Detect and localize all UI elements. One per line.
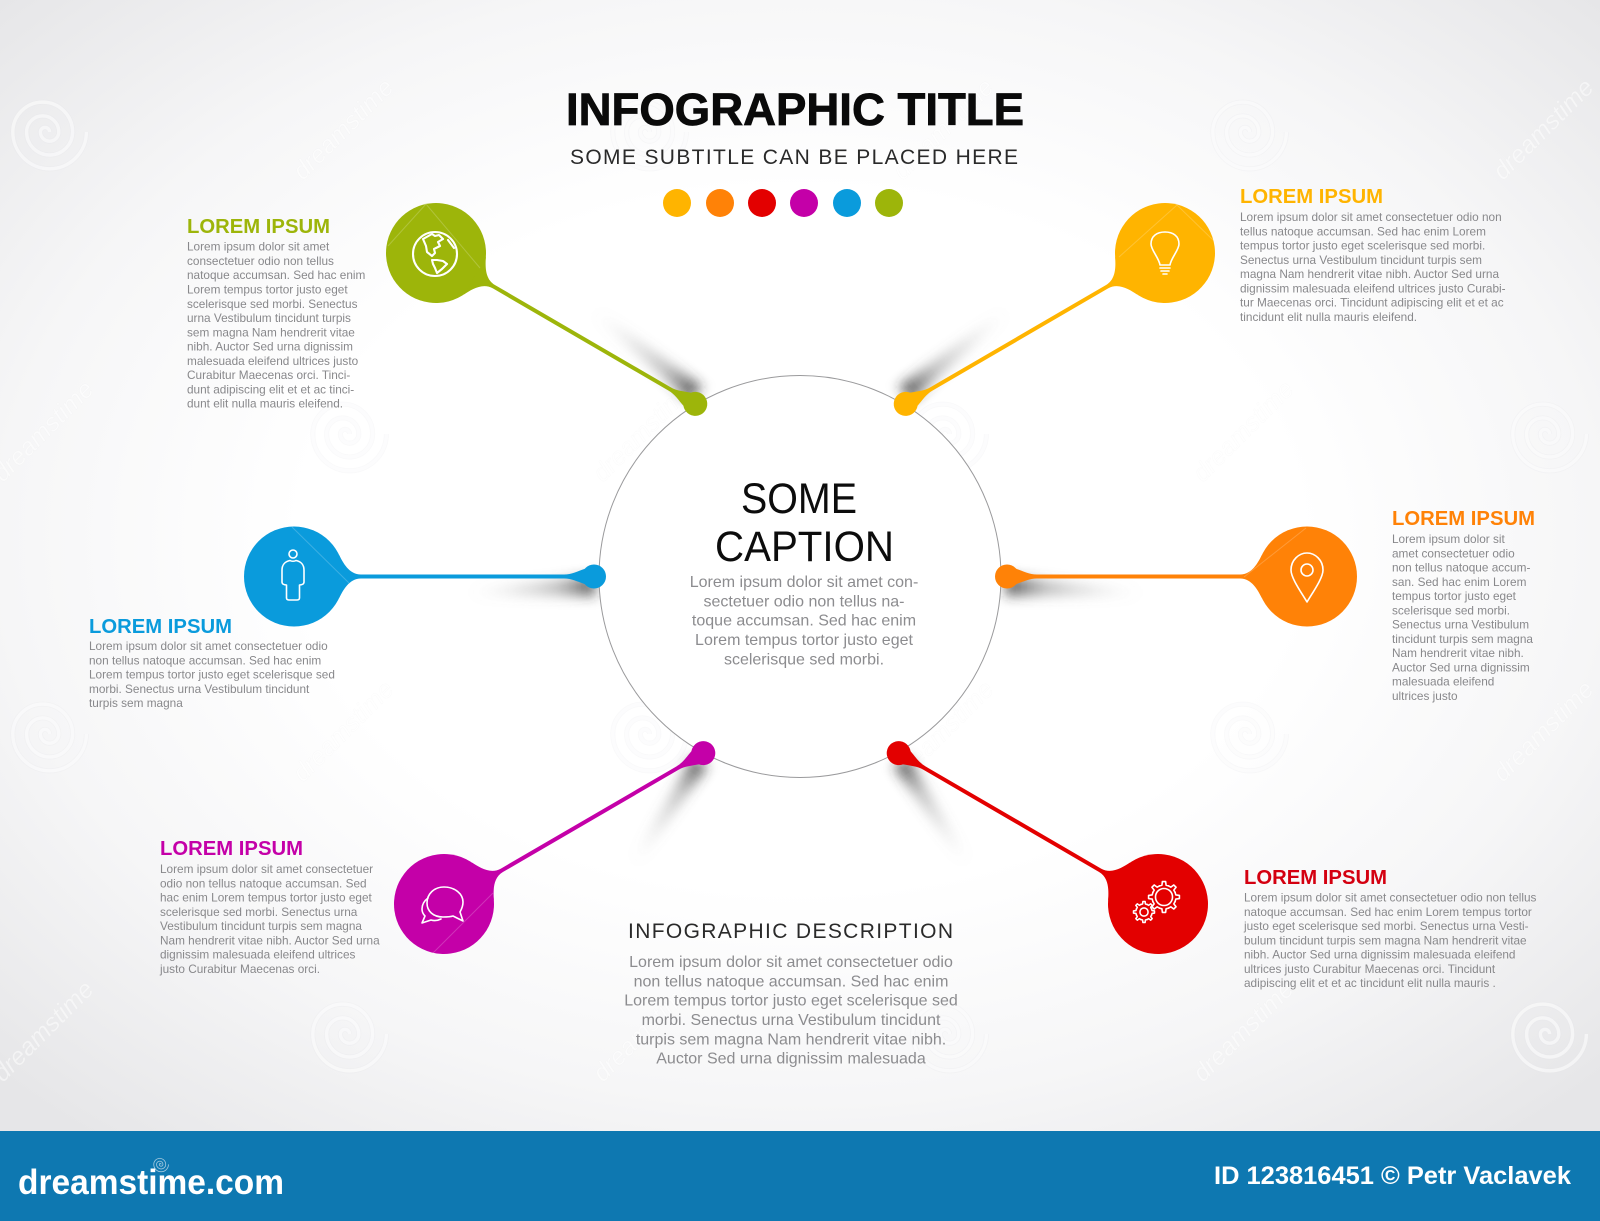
center body text: scelerisque sed morbi. — [724, 651, 884, 668]
center caption: CAPTION — [715, 523, 894, 571]
text: orange item: Senectus urna Vestibulum — [1392, 618, 1529, 632]
infographic description: Auctor Sed urna dignissim malesuada — [656, 1051, 926, 1068]
text: red item: bulum tincidunt turpis sem magna Nam hendrerit vitae — [1244, 933, 1527, 947]
center body text: Lorem tempus tortor justo eget — [695, 632, 913, 649]
text: yellow item: LOREM IPSUM — [1240, 186, 1383, 208]
infographic description: Lorem tempus tortor justo eget scelerisque sed — [624, 993, 958, 1010]
watermark text: dreamstime — [587, 975, 699, 1087]
watermark text: dreamstime — [887, 73, 999, 185]
text: blue item: non tellus natoque accumsan. Sed hac enim — [89, 653, 321, 667]
text: purple item: LOREM IPSUM — [160, 838, 303, 860]
text: blue item — [89, 616, 335, 710]
text: yellow item: magna Nam hendrerit vitae nibh. Auctor Sed urna — [1240, 267, 1499, 281]
text: blue item: morbi. Senectus urna Vestibulum tincidunt — [89, 682, 310, 696]
icon: person — [282, 550, 304, 600]
text: orange item: san. Sed hac enim Lorem — [1392, 575, 1527, 589]
text: green item: dunt elit nulla mauris eleifend. — [187, 397, 343, 411]
text: orange item: Lorem ipsum dolor sit — [1392, 532, 1505, 546]
text: green item: dunt adipiscing elit et et ac tinci- — [187, 382, 354, 396]
text: red item: ultrices justo Curabitur Maecenas orci. Tincidunt — [1244, 962, 1496, 976]
text: purple item: odio non tellus natoque accumsan. Sed — [160, 876, 367, 890]
watermark text: dreamstime — [887, 675, 999, 787]
text: purple item: hac enim Lorem tempus tortor justo eget — [160, 891, 373, 905]
shadows under connector lines — [470, 304, 1141, 868]
text: orange item: amet consectetuer odio — [1392, 546, 1515, 560]
text: red item: nibh. Auctor Sed urna dignissim malesuada eleifend — [1244, 948, 1516, 962]
watermark text: dreamstime — [287, 675, 399, 787]
text: yellow item: Lorem ipsum dolor sit amet consectetuer odio non — [1240, 210, 1502, 224]
text: yellow item: tur Maecenas orci. Tincidunt adipiscing elit et et ac — [1240, 296, 1504, 310]
pin: blue person — [244, 526, 606, 626]
text: purple item: Nam hendrerit vitae nibh. Auctor Sed urna — [160, 933, 380, 947]
watermark spirals — [13, 102, 1586, 1071]
text: yellow item: Senectus urna Vestibulum tincidunt turpis sem — [1240, 253, 1482, 267]
icon: light bulb — [1151, 232, 1179, 274]
icon: globe — [413, 232, 457, 276]
colour dots row — [663, 189, 903, 217]
text: blue item: Lorem ipsum dolor sit amet consectetuer odio — [89, 639, 328, 653]
text: purple item: dignissim malesuada eleifend ultrices — [160, 948, 356, 962]
text: green item: urna Vestibulum tincidunt turpis — [187, 311, 351, 325]
text: orange item: Nam hendrerit vitae nibh. — [1392, 646, 1524, 660]
text: green item: sem magna Nam hendrerit vitae — [187, 325, 355, 339]
center caption — [715, 475, 894, 571]
watermark text: dreamstime — [1487, 675, 1599, 787]
pin: green globe — [368, 185, 731, 453]
text: blue item: LOREM IPSUM — [89, 616, 232, 638]
infographic description — [624, 920, 958, 1068]
text: red item: Lorem ipsum dolor sit amet consectetuer odio non tellus — [1244, 890, 1537, 904]
text: purple item — [159, 838, 380, 976]
text: green item: consectetuer odio non tellus — [187, 254, 334, 268]
center body text: sectetuer odio non tellus na- — [703, 593, 905, 610]
text: green item: Lorem tempus tortor justo eget — [187, 282, 348, 296]
center body text — [690, 574, 918, 668]
watermark text: dreamstime — [587, 375, 699, 487]
text: orange item: tincidunt turpis sem magna — [1392, 632, 1533, 646]
text: orange item: malesuada eleifend — [1392, 675, 1494, 689]
text: purple item: scelerisque sed morbi. Senectus urna — [160, 905, 358, 919]
pin: purple chat — [376, 704, 739, 972]
infographic description: INFOGRAPHIC DESCRIPTION — [628, 920, 953, 943]
text: blue item: turpis sem magna — [89, 696, 183, 710]
footer credit: ID 123816451 © Petr Vaclavek — [1214, 1162, 1571, 1190]
text: green item: malesuada eleifend ultrices justo — [187, 354, 359, 368]
text: orange item: scelerisque sed morbi. — [1392, 603, 1510, 617]
text: red item: adipiscing elit et et ac tincidunt elit nulla mauris . — [1244, 976, 1496, 990]
text: green item: Lorem ipsum dolor sit amet — [187, 240, 330, 254]
title: INFOGRAPHIC TITLE — [566, 84, 1024, 135]
text: purple item: justo Curabitur Maecenas orci. — [159, 962, 320, 976]
watermark text: dreamstime — [1187, 975, 1299, 1087]
text: purple item: Vestibulum tincidunt turpis sem magna — [160, 919, 362, 933]
watermark text: dreamstime — [287, 73, 399, 185]
infographic description: morbi. Senectus urna Vestibulum tincidunt — [642, 1012, 941, 1029]
infographic description: turpis sem magna Nam hendrerit vitae nibh. — [636, 1031, 946, 1048]
text: orange item — [1392, 508, 1535, 703]
pin: yellow bulb — [870, 185, 1233, 453]
text: green item: natoque accumsan. Sed hac enim — [187, 268, 366, 282]
text: blue item: Lorem tempus tortor justo eget scelerisque sed — [89, 668, 335, 682]
infographic description: Lorem ipsum dolor sit amet consectetuer odio — [629, 954, 953, 971]
text: green item — [187, 216, 366, 411]
infographic description: non tellus natoque accumsan. Sed hac enim — [634, 973, 948, 990]
central circle — [599, 376, 1001, 778]
text: purple item: Lorem ipsum dolor sit amet consectetuer — [160, 862, 373, 876]
icon: gears — [1134, 882, 1179, 922]
center body text: Lorem ipsum dolor sit amet con- — [690, 574, 918, 591]
text: orange item: tempus tortor justo eget — [1392, 589, 1517, 603]
subtitle: SOME SUBTITLE CAN BE PLACED HERE — [570, 146, 1018, 169]
icon: speech bubbles — [422, 887, 463, 923]
text: yellow item — [1240, 186, 1506, 324]
text: yellow item: tincidunt elit nulla mauris eleifend. — [1240, 310, 1417, 324]
text: yellow item: tellus natoque accumsan. Sed hac enim Lorem — [1240, 224, 1486, 238]
text: red item: LOREM IPSUM — [1244, 867, 1387, 889]
watermark text: dreamstime — [1487, 73, 1599, 185]
text: green item: LOREM IPSUM — [187, 216, 330, 238]
text: red item — [1243, 867, 1537, 990]
center caption: SOME — [741, 475, 857, 523]
text: yellow item: tempus tortor justo eget scelerisque sed morbi. — [1240, 239, 1485, 253]
footer bar — [0, 1131, 1600, 1221]
text: red item: natoque accumsan. Sed hac enim Lorem tempus tortor — [1244, 905, 1532, 919]
text: orange item: ultrices justo — [1392, 689, 1458, 703]
text: orange item: non tellus natoque accum- — [1392, 561, 1530, 575]
text: green item: Curabitur Maecenas orci. Tinci- — [187, 368, 350, 382]
text: green item: nibh. Auctor Sed urna dignissim — [187, 340, 353, 354]
text: yellow item: dignissim malesuada eleifend ultrices justo Curabi- — [1240, 281, 1506, 295]
center body text: toque accumsan. Sed hac enim — [692, 613, 916, 630]
pin: red gears — [863, 704, 1226, 972]
text: orange item: LOREM IPSUM — [1392, 508, 1535, 530]
text: green item: scelerisque sed morbi. Senectus — [187, 297, 358, 311]
icon: location marker — [1291, 553, 1323, 602]
text: orange item: Auctor Sed urna dignissim — [1392, 660, 1530, 674]
footer logo: dreamstime.com — [18, 1163, 284, 1202]
watermark text: dreamstime — [1187, 375, 1299, 487]
pin: orange location — [995, 526, 1357, 626]
text: red item: justo eget scelerisque sed morbi. Senectus urna Vesti- — [1243, 919, 1529, 933]
